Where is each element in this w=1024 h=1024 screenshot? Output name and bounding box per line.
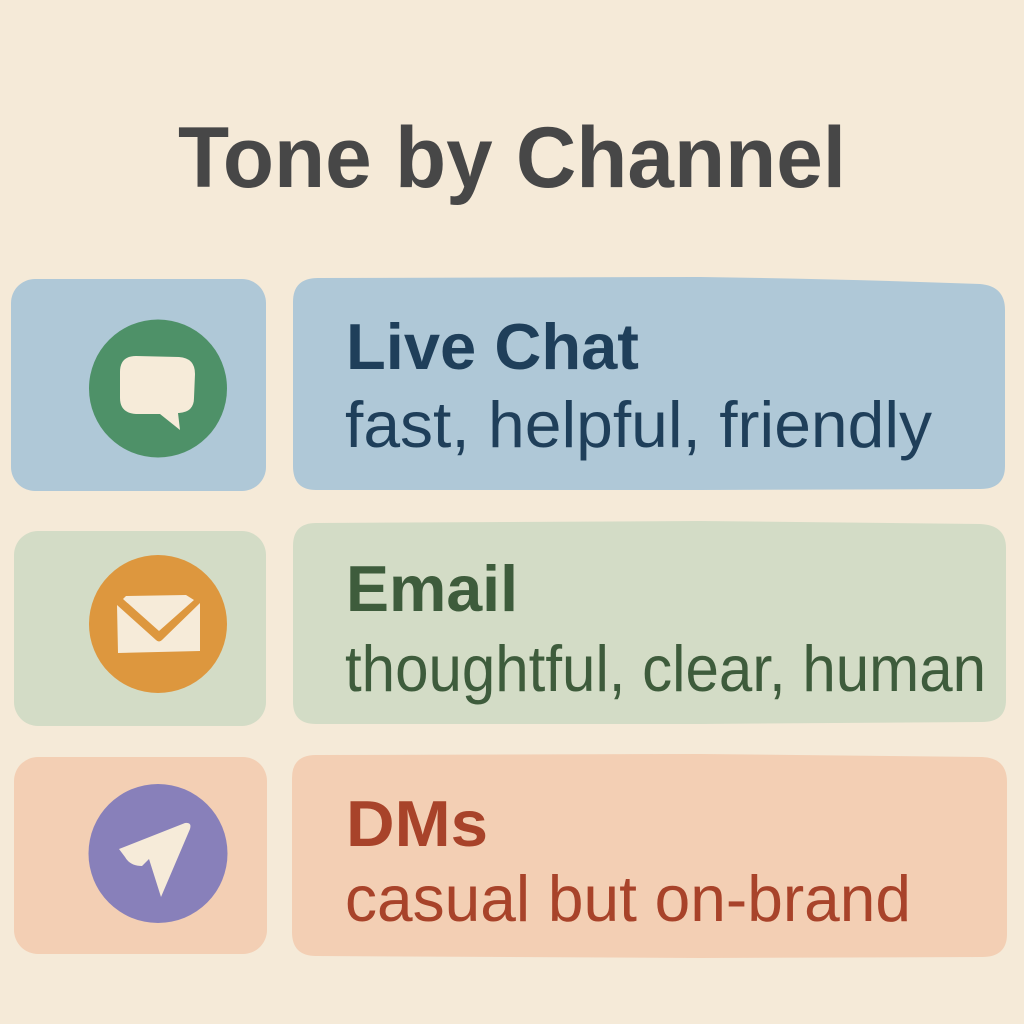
text panel: dms — [292, 754, 1007, 958]
text panel: live chat — [293, 277, 1005, 490]
heading: dms: DMs — [346, 787, 488, 860]
panel: email row — [14, 521, 1006, 726]
icon panel: live chat — [11, 279, 266, 491]
description: live chat: fast, helpful, friendly — [345, 388, 932, 461]
icon: paper plane — [88, 784, 228, 923]
title: Tone by Channel — [178, 110, 846, 206]
text panel: email — [293, 521, 1006, 724]
heading: email: Email — [346, 552, 518, 625]
heading: live chat: Live Chat — [346, 310, 639, 383]
panel: dms row — [14, 754, 1007, 958]
description: dms: casual but on-brand — [345, 862, 911, 935]
icon: speech bubble — [89, 320, 227, 458]
panel: live chat row — [11, 277, 1005, 491]
icon panel: dms — [14, 757, 267, 954]
description: email: thoughtful, clear, human — [345, 632, 986, 705]
icon panel: email — [14, 531, 266, 726]
icon: envelope — [89, 555, 227, 693]
